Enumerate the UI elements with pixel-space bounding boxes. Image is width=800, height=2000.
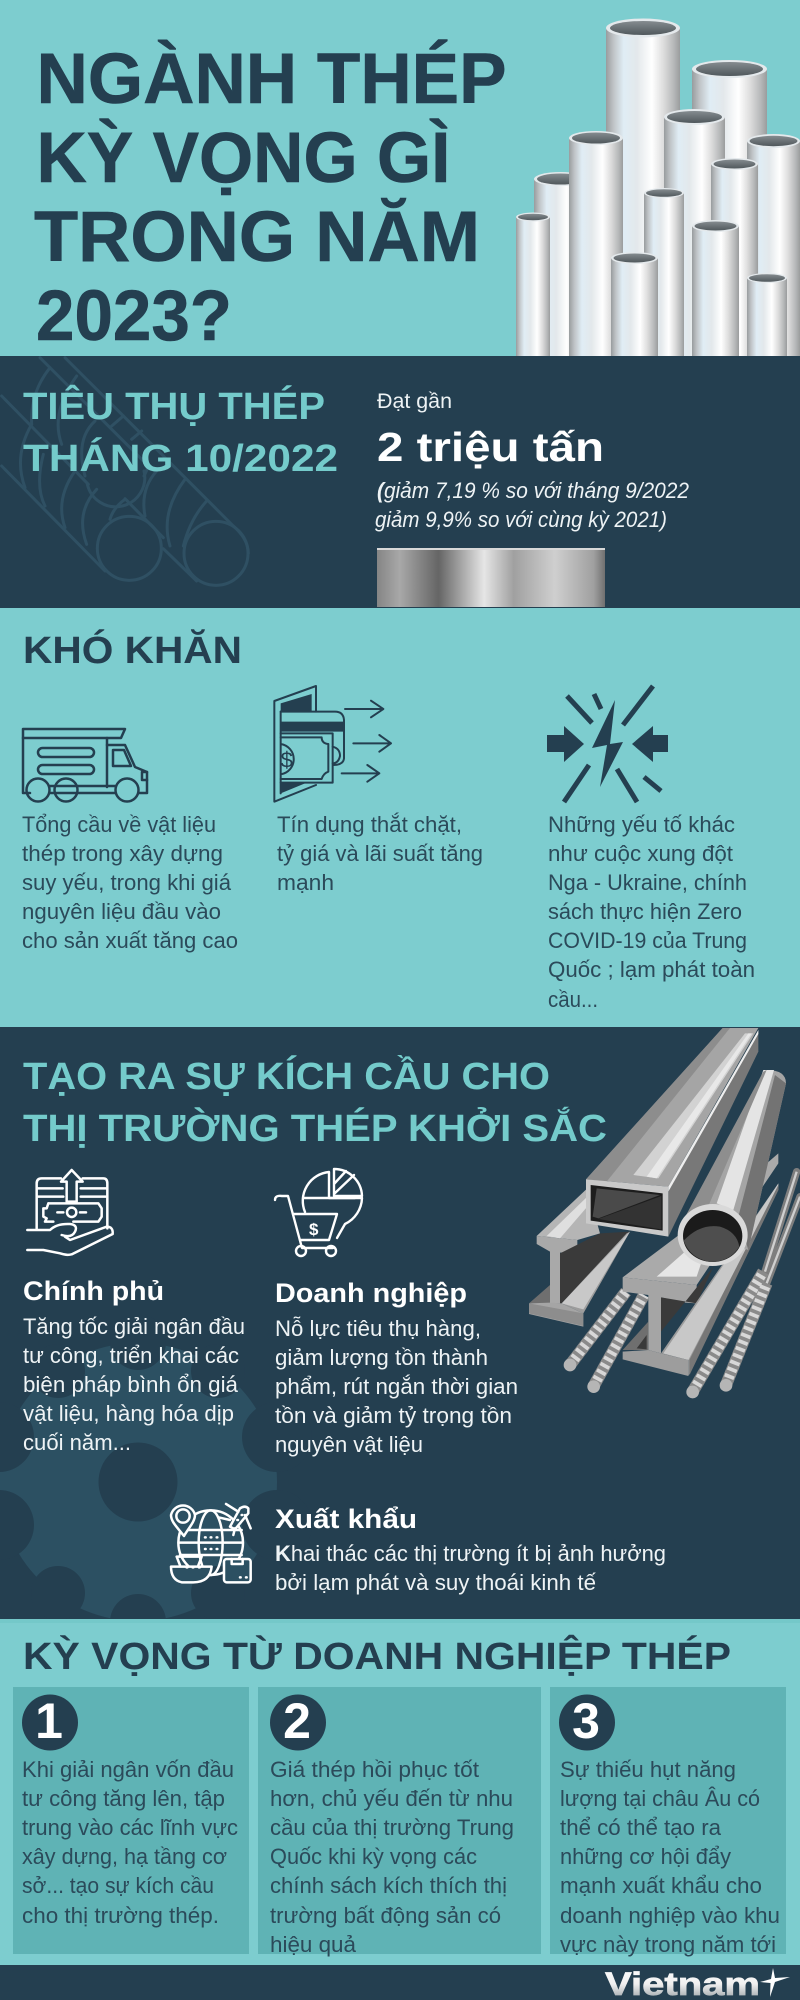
rebars left [570,1292,644,1387]
card: expectation 2: hiệu quả [270,1932,356,1957]
heading: expectations: KỲ VỌNG TỪ DOANH NGHIỆP THÉP [23,1634,731,1678]
footer bar [0,1965,800,2000]
illustration: steel bars and beams [529,1028,800,1398]
text: export actions: bởi lạm phát và suy thoái kinh tế [275,1570,596,1595]
card: expectation 1: 1 [35,1693,63,1749]
card: expectation 2: cầu của thị trường Trung [270,1815,514,1840]
rebars right [693,1172,800,1392]
text: difficulty 1: suy yếu, trong khi giá [22,870,231,895]
front I-beam [623,1153,778,1376]
card: expectation 1: tư công tăng lên, tập [22,1786,225,1811]
text: difficulty 3: Quốc ; lạm phát toàn [548,957,755,982]
label: enterprises: Doanh nghiệp [275,1278,467,1308]
card: expectation 3: doanh nghiệp vào khu [560,1903,780,1928]
text: enterprise actions: phẩm, rút ngắn thời gian [275,1374,518,1399]
card: expectation 3: Sự thiếu hụt năng [560,1757,736,1782]
square tube [586,1028,758,1237]
icon: shopping cart with pie chart [275,1169,362,1256]
background: rebar outlines [2,358,248,585]
background: gear [0,1314,312,1650]
text: reached nearly: Đạt gần [377,390,452,413]
text: difficulty 2: tỷ giá và lãi suất tăng [277,841,483,866]
card: expectation 3: mạnh xuất khẩu cho [560,1873,762,1898]
icon: government money hand [27,1170,113,1255]
text: enterprise actions: nguyên vật liệu [275,1432,423,1457]
heading: stimulating demand [23,1054,607,1150]
text: difficulty 3: Nga - Ukraine, chính [548,870,747,895]
text: difficulty 1: cho sản xuất tăng cao [22,928,238,953]
card: expectation 3: thể có thể tạo ra [560,1815,721,1840]
title: NGÀNH THÉP [36,40,507,119]
label: export: Xuất khẩu [275,1504,417,1534]
heading: stimulating demand: TẠO RA SỰ KÍCH CẦU CHO [23,1054,550,1098]
card: expectation 3: những cơ hội đẩy [560,1844,732,1869]
card: expectation 2 [258,1687,541,1957]
label: government: Chính phủ [23,1276,164,1306]
round tube [678,1070,786,1266]
icon: lightning bolt with arrows [547,686,668,802]
card: expectation 1: sở... tạo sự kích cầu [22,1873,214,1898]
icon: wallet with card and arrows [274,686,391,802]
illustration: steel pipes [516,18,800,359]
card: expectation 2: hơn, chủ yếu đến từ nhu [270,1786,513,1811]
text: government actions: cuối năm... [23,1430,131,1455]
card: expectation 1: cho thị trường thép. [22,1903,219,1928]
text: difficulty 3: cầu... [548,987,598,1012]
text: enterprise actions: giảm lượng tồn thành [275,1345,488,1370]
text: change comparison: giảm 9,9% so với cùng kỳ 2021) [375,507,667,532]
text: difficulty 1: Tổng cầu về vật liệu [22,812,216,837]
card: expectation 1: xây dựng, hạ tầng cơ [22,1844,227,1869]
text: difficulty 3: như cuộc xung đột [548,841,734,866]
text: difficulty 3: COVID-19 của Trung [548,928,747,953]
text: difficulty 2 [277,812,483,895]
heading: steel consumption: THÁNG 10/2022 [23,436,338,480]
title [34,40,507,356]
text: government actions: tư công, triển khai các [23,1343,239,1368]
text: enterprise actions: tồn và giảm tỷ trọng tồn [275,1403,512,1428]
title: KỲ VỌNG GÌ [36,119,450,198]
text: government actions: Tăng tốc giải ngân đầu [23,1314,245,1339]
logo: Vietnam+ [605,1966,790,2000]
text: export actions [275,1541,666,1595]
card: expectation 1 [13,1687,249,1954]
back I-beam [529,1188,630,1327]
card: expectation 3: vực này trong năm tới [560,1932,776,1957]
icon: truck [23,729,147,802]
text: difficulty 1: thép trong xây dựng [22,841,223,866]
text: difficulty 3: Những yếu tố khác [548,812,735,837]
card: expectation 3: 3 [572,1693,600,1749]
icon: shopping cart with pie chart: $ [309,1220,319,1239]
card: expectation 3: lượng tại châu Âu có [560,1786,760,1811]
text: government actions: biện pháp bình ổn giá [23,1372,238,1397]
card: expectation 2: 2 [283,1693,311,1749]
panel: steel consumption October 2022 [0,356,800,608]
text: export actions: Khai thác các thị trường ít bị ảnh hưởng [275,1541,666,1566]
text: difficulty 1: nguyên liệu đầu vào [22,899,221,924]
title: TRONG NĂM [34,198,480,277]
text: government actions: vật liệu, hàng hóa dịp [23,1401,234,1426]
card: expectation 1: trung vào các lĩnh vực [22,1815,238,1840]
card: expectation 2: Quốc khi kỳ vọng các [270,1844,477,1869]
text: difficulty 2: Tín dụng thắt chặt, [277,812,462,837]
icon: globe with pin, plane, ship and box [171,1504,251,1582]
title: 2023? [36,277,232,356]
text: change comparison: (giảm 7,19 % so với tháng 9/2022 [377,478,689,503]
text: change comparison [375,478,689,532]
card: expectation 2: Giá thép hồi phục tốt [270,1757,480,1782]
card: expectation 2: trường bất động sản có [270,1903,501,1928]
text: difficulty 3: sách thực hiện Zero [548,899,742,924]
card: expectation 1: Khi giải ngân vốn đầu [22,1757,234,1782]
text: government actions [23,1314,245,1455]
text: difficulty 1 [22,812,238,953]
text: enterprise actions: Nỗ lực tiêu thụ hàng, [275,1316,481,1341]
heading: difficulties: KHÓ KHĂN [23,628,242,672]
heading: stimulating demand: THỊ TRƯỜNG THÉP KHỞI SẮC [23,1106,607,1150]
panel: expectations from steel enterprises [0,1619,800,1965]
figure: 2 million tons: 2 triệu tấn [377,424,604,470]
card: expectation 3 [550,1687,786,1957]
icon: wallet with card and arrows: $ [281,747,293,772]
panel: stimulating demand [0,1027,800,1650]
text: difficulty 3 [548,812,755,1012]
card: expectation 2: chính sách kích thích thị [270,1873,507,1898]
heading: steel consumption [23,384,338,480]
steel block bar [377,548,605,607]
heading: steel consumption: TIÊU THỤ THÉP [23,384,325,428]
text: difficulty 2: mạnh [277,870,334,895]
text: enterprise actions [275,1316,518,1457]
